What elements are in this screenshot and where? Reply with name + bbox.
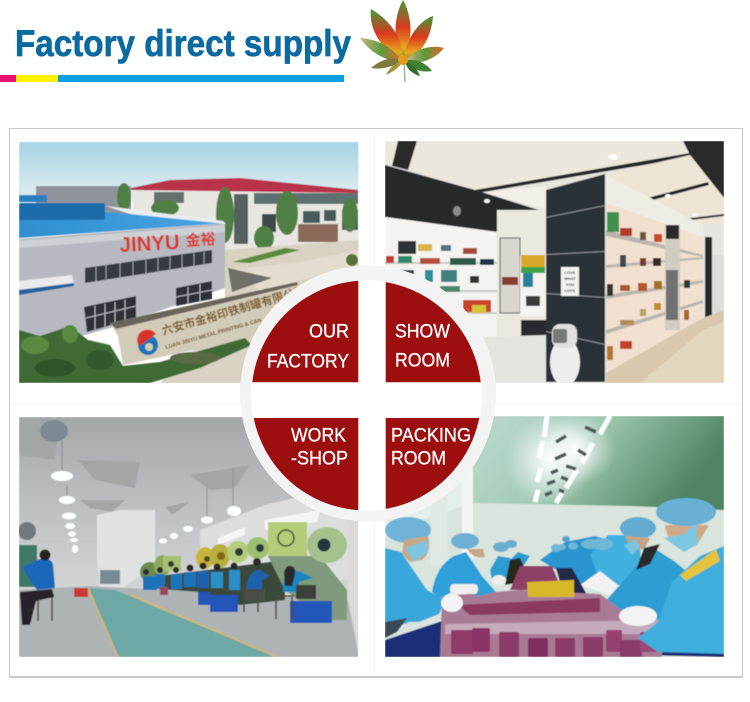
- quadrant: workshop: -SHOP: [291, 448, 348, 470]
- quadrant: our factory: FACTORY: [267, 352, 349, 372]
- yellow box: [527, 580, 574, 597]
- quadrant: packing room: [252, 280, 482, 510]
- quadrant: our factory: OUR: [309, 322, 349, 342]
- white floor left: [483, 334, 547, 340]
- lower windows: [84, 281, 212, 332]
- back workers row: [540, 535, 642, 585]
- distant grey building: [36, 186, 131, 216]
- dark ceiling beams: [392, 141, 417, 170]
- love poster: WHAT: [564, 276, 576, 281]
- right ceiling: [607, 155, 724, 225]
- tricolour underline bar: [0, 75, 344, 82]
- icon: multicoloured leaf: [360, 0, 444, 82]
- central circle badge: [240, 266, 496, 522]
- photo: workshop: [18, 417, 359, 657]
- factory sign letters: JINYU: [119, 231, 180, 257]
- green ceiling: [473, 416, 724, 510]
- ceiling and walls: [19, 417, 351, 600]
- photo: our factory: [19, 142, 359, 383]
- background: [385, 141, 724, 383]
- ceiling lights: [505, 415, 615, 505]
- sky: [19, 142, 359, 202]
- quadrant: packing room: PACKING: [391, 426, 471, 446]
- trees: [117, 183, 358, 250]
- wall: [385, 500, 724, 657]
- inner white disc: [251, 280, 482, 511]
- left worker: [385, 517, 463, 638]
- pillar: [462, 470, 473, 560]
- ground and road: [160, 240, 359, 383]
- purple product cups: [440, 566, 662, 657]
- central dark column: [546, 174, 605, 382]
- red crate: [74, 588, 88, 597]
- left display shelves: [385, 217, 497, 340]
- green aisle stripe: [88, 588, 277, 657]
- quadrant: our factory: [252, 280, 482, 510]
- quadrant: packing room: ROOM: [391, 448, 446, 470]
- love poster: LOVE: [565, 270, 576, 275]
- photo: our factory: LUAN JINYU METAL PRINTING & CAN: [165, 318, 262, 351]
- second left worker: [432, 533, 506, 598]
- floor: [19, 586, 359, 657]
- outer pale ring: [240, 266, 496, 522]
- row of green presses: [140, 522, 347, 620]
- title: Factory direct supply: [15, 23, 351, 64]
- right side wall: [200, 498, 348, 580]
- quadrant: show room: ROOM: [395, 350, 450, 372]
- blue workers: [143, 570, 313, 592]
- right foreground worker: [619, 498, 724, 654]
- quadrant: show room: [252, 280, 482, 510]
- wooden stools: [36, 591, 294, 621]
- ceiling spot lights: [453, 154, 698, 217]
- pendant lamps: [40, 420, 241, 553]
- photo: packing room: [385, 415, 724, 657]
- love poster: [561, 267, 579, 296]
- awning: [19, 275, 74, 290]
- warm floor: [606, 310, 724, 383]
- blue roof: [19, 212, 225, 238]
- wall lettering: 六安市金裕印铁制罐有限公司: [160, 283, 308, 338]
- robot: [550, 324, 580, 386]
- dark rear wall: [385, 164, 538, 232]
- worker heads and legs: [143, 558, 316, 601]
- blue plastic crates: [160, 587, 332, 623]
- ceiling panels: [408, 142, 690, 190]
- foreground worker: [18, 522, 55, 625]
- dark machine bases: [143, 560, 285, 605]
- upper shelf wall: [607, 177, 702, 236]
- right shelf wall: [606, 203, 703, 373]
- product items on right shelves: [607, 212, 690, 360]
- wall logo: [137, 330, 158, 355]
- photo: show room: [385, 141, 724, 386]
- office building: [131, 178, 359, 255]
- window band: [85, 250, 212, 283]
- panel frame: [9, 128, 743, 678]
- yellow floor lines: [88, 588, 277, 657]
- photo: our factory: 金裕: [185, 230, 216, 250]
- second right worker: [580, 517, 696, 623]
- stone entrance wall: [110, 282, 297, 365]
- quadrant: workshop: WORK: [291, 426, 346, 446]
- factory wall: [19, 223, 225, 342]
- quadrant: workshop: [252, 280, 482, 510]
- green hedge: [19, 325, 252, 383]
- love poster: LOVE: [565, 288, 576, 293]
- far dark post and wall: [705, 237, 712, 318]
- conveyor table: [385, 558, 724, 657]
- quadrant: show room: SHOW: [395, 322, 450, 342]
- ceiling recesses: [20, 439, 249, 515]
- back wall: [97, 510, 155, 590]
- back worker heads left: [490, 540, 530, 580]
- love poster: YOU: [566, 282, 574, 287]
- shelf products: [386, 241, 545, 313]
